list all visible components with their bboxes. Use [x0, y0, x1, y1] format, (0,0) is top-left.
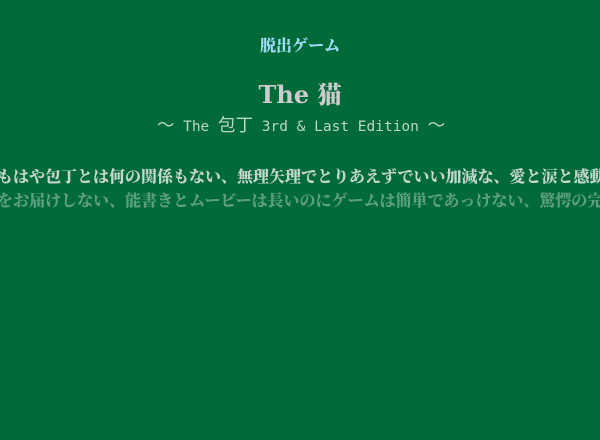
scrolling text line 2: をお届けしない、能書きとムービーは長いのにゲームは簡単であっけない、驚愕の完 [0, 188, 600, 211]
subtitle: ～ The 包丁 3rd & Last Edition ～ [157, 115, 445, 135]
scrolling text line 1: もはや包丁とは何の関係もない、無理矢理でとりあえずでいい加減な、愛と涙と感動 [0, 164, 600, 187]
heading: genre label: 脱出ゲーム [260, 33, 340, 56]
title: The 猫 [259, 80, 341, 109]
